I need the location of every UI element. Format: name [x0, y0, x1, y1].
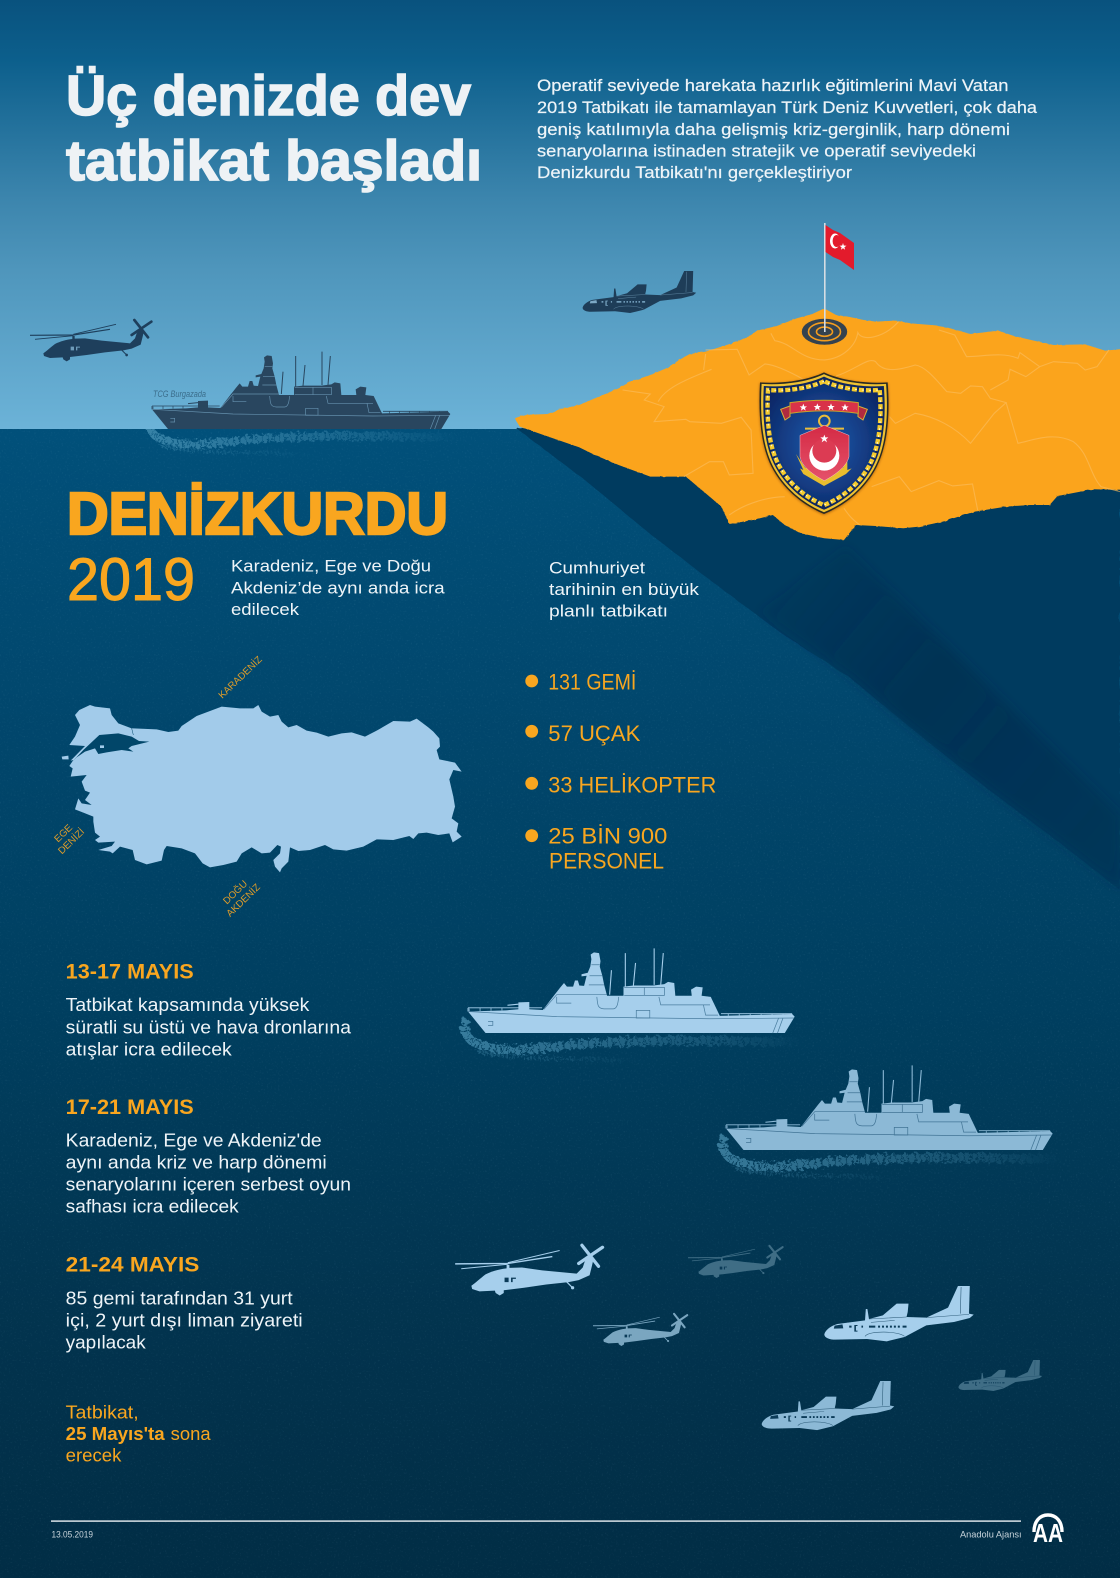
- timeline: 13-17 May: atışlar icra edilecek: [66, 1039, 233, 1059]
- label: Doğu Akdeniz: AKDENİZ: [225, 882, 263, 919]
- timeline: 21-24 May: yapılacak: [66, 1333, 147, 1353]
- footer rule: [51, 1520, 1021, 1522]
- intro text: [537, 76, 1038, 182]
- year: 2019: [67, 546, 195, 613]
- icon: helicopter medium: [593, 1314, 687, 1346]
- footer date: 13.05.2019: [52, 1529, 93, 1539]
- icon: plane large: [824, 1286, 974, 1341]
- land underwater shadow: [516, 428, 1120, 890]
- icon: Turkish flag: [824, 223, 854, 332]
- text: largest exercise: tarihinin en büyük: [549, 580, 700, 599]
- icon: plane over sea: [583, 271, 696, 313]
- timeline: 17-21 May: [66, 1095, 351, 1217]
- text: largest exercise: Cumhuriyet: [549, 558, 645, 577]
- timeline: 21-24 May: 85 gemi tarafından 31 yurt: [66, 1288, 293, 1308]
- closing note: sona: [171, 1424, 212, 1444]
- text: seas description: Akdeniz’de aynı anda icra: [231, 578, 445, 597]
- list: force numbers: [525, 669, 716, 873]
- island land mass: [515, 308, 1120, 540]
- timeline: 17-21 May: safhası icra edilecek: [66, 1197, 240, 1217]
- list: force numbers: 131 GEMİ: [548, 669, 636, 694]
- map: Turkey: [62, 705, 462, 872]
- water grain texture: [0, 429, 1120, 1578]
- timeline: 13-17 May: [66, 959, 352, 1059]
- closing note: 25 Mayıs'ta: [66, 1424, 166, 1444]
- timeline: 21-24 May: 21-24 MAYIS: [66, 1253, 199, 1277]
- label: Ege Denizi: DENİZİ: [56, 827, 87, 857]
- text: seas description: Karadeniz, Ege ve Doğu: [231, 557, 431, 576]
- icon: plane medium: [762, 1381, 894, 1430]
- intro text: senaryolarına istinaden stratejik ve operatif seviyedeki: [537, 142, 976, 160]
- ship: light frigate 1: [465, 948, 805, 1061]
- title: tatbikat başladı: [66, 129, 482, 193]
- text: seas description: [231, 557, 445, 619]
- text: largest exercise: planlı tatbikatı: [549, 602, 668, 621]
- icon: helicopter large: [455, 1245, 603, 1295]
- list: force numbers: 25 BİN 900: [548, 823, 667, 848]
- intro text: Denizkurdu Tatbikatı'nı gerçekleştiriyor: [537, 163, 852, 182]
- timeline: 13-17 May: süratli su üstü ve hava dronlarına: [66, 1017, 352, 1037]
- closing note: erecek: [66, 1446, 122, 1466]
- heading: Denizkurdu: DENİZKURDU: [67, 481, 448, 547]
- sky background: [0, 0, 1120, 430]
- timeline: 17-21 May: Karadeniz, Ege ve Akdeniz'de: [66, 1131, 322, 1151]
- intro text: 2019 Tatbikatı ile tamamlayan Türk Deniz Kuvvetleri, çok daha: [537, 98, 1038, 117]
- ship: TCG Burgazada: TCG Burgazada: [153, 389, 206, 399]
- title: Üç denizde dev: [66, 64, 471, 128]
- timeline: 13-17 May: 13-17 MAYIS: [66, 959, 194, 983]
- timeline: 17-21 May: 17-21 MAYIS: [66, 1095, 194, 1119]
- timeline: 17-21 May: aynı anda kriz ve harp dönemi: [66, 1153, 327, 1173]
- label: Karadeniz: KARADENİZ: [217, 654, 265, 701]
- label: Doğu Akdeniz: DOĞU: [221, 879, 250, 907]
- timeline: 21-24 May: [66, 1253, 303, 1353]
- closing note: Tatbikat,: [66, 1402, 139, 1422]
- list: force numbers: 33 HELİKOPTER: [548, 772, 716, 797]
- intro text: geniş katılımıyla daha gelişmiş kriz-gerginlik, harp dönemi: [537, 120, 1010, 139]
- icon: helicopter over sea: [30, 320, 151, 361]
- timeline: 13-17 May: Tatbikat kapsamında yüksek: [66, 995, 310, 1015]
- title: [66, 64, 482, 193]
- closing note: [66, 1402, 212, 1466]
- emblem: naval forces shield: [759, 372, 889, 514]
- text: largest exercise: [549, 558, 700, 621]
- timeline: 21-24 May: içi, 2 yurt dışı liman ziyareti: [66, 1311, 303, 1331]
- footer source: Anadolu Ajansı: [960, 1529, 1022, 1539]
- intro text: Operatif seviyede harekata hazırlık eğitimlerini Mavi Vatan: [537, 76, 1008, 95]
- sea background: [0, 429, 1120, 1578]
- timeline: 17-21 May: senaryolarını içeren serbest oyun: [66, 1175, 351, 1195]
- list: force numbers: 57 UÇAK: [548, 721, 641, 746]
- icon: landing target: [802, 318, 848, 345]
- ship: light frigate 2: [723, 1065, 1063, 1178]
- icon: helicopter dim: [688, 1246, 783, 1278]
- icon: plane dim: [958, 1360, 1042, 1391]
- text: seas description: edilecek: [231, 600, 300, 619]
- label: Ege Denizi: EGE: [52, 822, 75, 845]
- list: force numbers: PERSONEL: [549, 848, 664, 873]
- icon: Anadolu Agency logo: AA: [1033, 1518, 1063, 1548]
- ship: TCG Burgazada: [149, 352, 460, 455]
